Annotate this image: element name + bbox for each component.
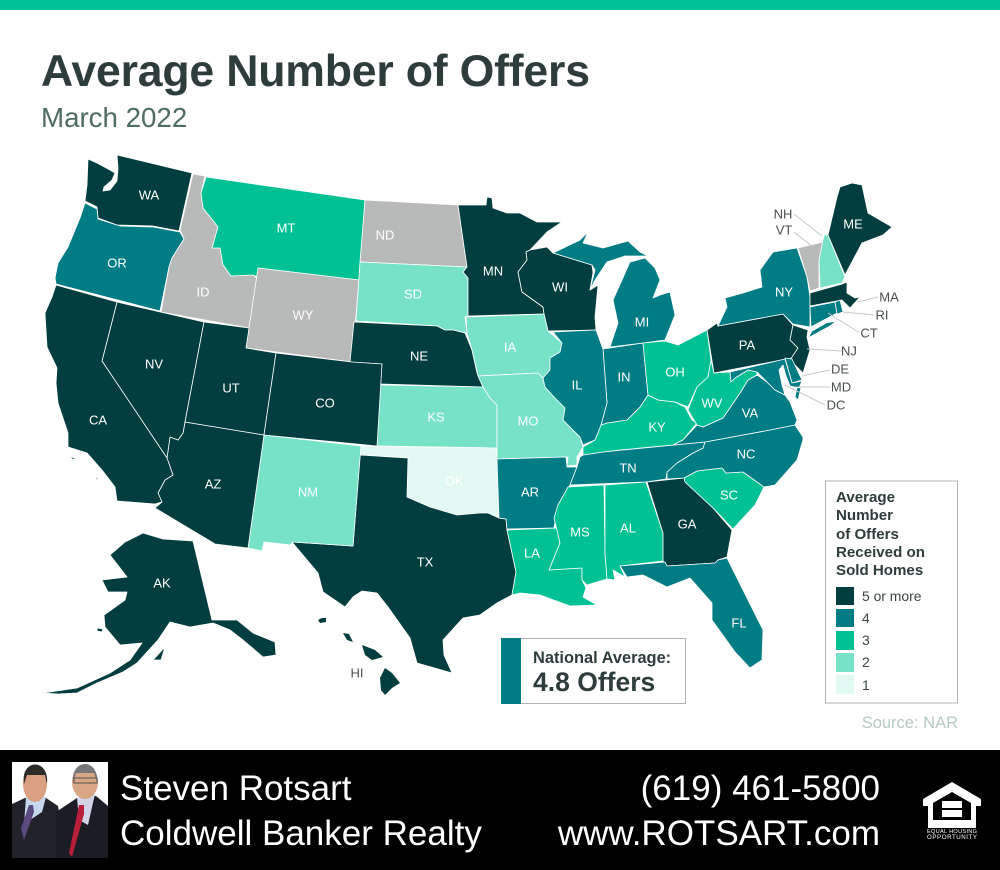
state: SC: SC xyxy=(720,488,738,502)
state: OH: OH xyxy=(665,364,685,380)
state: ND: ND xyxy=(376,228,394,242)
state: ID: ID xyxy=(196,284,210,300)
state: PA xyxy=(707,314,798,373)
label: RI xyxy=(843,308,888,322)
state: LA: LA xyxy=(524,546,540,560)
national average callout: 4.8 Offers xyxy=(533,667,655,697)
legend heading: of Offers xyxy=(836,526,899,543)
state: MD xyxy=(730,359,802,395)
state: CT xyxy=(810,302,837,327)
state: AZ xyxy=(155,422,264,548)
legend heading: Average xyxy=(836,489,895,506)
state: OR: OR xyxy=(107,256,127,270)
footer bar xyxy=(0,750,1000,870)
state: OK xyxy=(360,446,499,518)
state: SC xyxy=(684,468,764,529)
state: AK xyxy=(43,533,276,694)
state: MT: MT xyxy=(277,220,295,236)
state: KY: KY xyxy=(648,420,666,434)
label: NJ: NJ xyxy=(841,344,857,358)
state: ME: ME xyxy=(843,216,863,232)
legend labels: 4 xyxy=(862,610,870,626)
state: TX: TX xyxy=(417,554,434,570)
state: WY xyxy=(246,268,359,362)
state: NC: NC xyxy=(737,446,755,462)
state: AK: AK xyxy=(153,576,171,590)
state: WY: WY xyxy=(293,308,314,322)
legend xyxy=(826,481,958,703)
state: HI xyxy=(318,618,400,695)
legend labels: 1 xyxy=(862,677,870,693)
label: MA: MA xyxy=(879,290,899,304)
state: NE xyxy=(350,322,483,387)
state: WI: WI xyxy=(552,280,568,294)
state: AZ: AZ xyxy=(205,476,221,492)
national average callout xyxy=(501,638,686,704)
state: WA: WA xyxy=(139,188,160,202)
state: CA: CA xyxy=(89,412,107,428)
state: AL xyxy=(605,482,663,580)
state: IN xyxy=(601,343,648,425)
state: IL: IL xyxy=(572,378,582,392)
state: UT xyxy=(185,322,276,435)
state: ND xyxy=(360,200,467,267)
company name: Coldwell Banker Realty xyxy=(120,814,482,853)
state: FL: FL xyxy=(731,616,747,630)
legend heading: Number xyxy=(836,507,893,524)
state: WI xyxy=(518,247,598,331)
state: NH xyxy=(819,235,845,288)
state: ME xyxy=(828,183,892,275)
state: CO: CO xyxy=(315,396,335,410)
state: MO xyxy=(478,373,583,466)
state: TN xyxy=(570,442,705,485)
state: NV xyxy=(102,302,204,458)
state: KY xyxy=(583,395,697,455)
label: MD xyxy=(795,380,851,394)
state: GA xyxy=(647,478,732,566)
state: IL xyxy=(543,330,607,445)
label: DE: DE xyxy=(831,362,849,376)
state: OR xyxy=(55,203,184,311)
top accent bar xyxy=(0,0,1000,10)
state: SD: SD xyxy=(404,286,422,302)
state: MO: MO xyxy=(518,414,538,428)
US map xyxy=(43,155,892,695)
state: DE xyxy=(785,358,802,383)
state: PA: PA xyxy=(739,338,756,352)
icon: equal housing opportunity xyxy=(923,782,981,841)
label: DC: DC xyxy=(827,398,845,412)
agent name: Steven Rotsart xyxy=(120,769,352,808)
state: VA: VA xyxy=(742,406,759,420)
state: TN: TN xyxy=(619,460,637,476)
state: MT xyxy=(201,177,365,280)
leader labels for small northeastern states xyxy=(774,206,899,412)
state: UT: UT xyxy=(222,380,240,396)
label: NJ xyxy=(807,344,857,358)
state: CO xyxy=(264,353,382,446)
legend heading: Sold Homes xyxy=(836,562,923,579)
state: CA xyxy=(45,285,173,504)
state: NE: NE xyxy=(410,348,428,364)
phone number: (619) 461-5800 xyxy=(641,769,880,808)
state: ID xyxy=(161,174,257,328)
state: AR xyxy=(497,457,577,529)
state: NM xyxy=(248,435,361,551)
label: VT: VT xyxy=(776,222,792,238)
label: MD: MD xyxy=(831,380,851,394)
state: RI xyxy=(835,300,843,314)
state: OH xyxy=(643,330,711,407)
label: CT xyxy=(828,313,878,340)
label: CT: CT xyxy=(860,326,878,340)
state: NY xyxy=(718,248,836,338)
state: AL: AL xyxy=(620,520,636,536)
state: IN: IN xyxy=(618,370,630,384)
state: KS xyxy=(377,385,497,448)
icon: equal housing opportunity: OPPORTUNITY xyxy=(927,834,977,841)
state: LA xyxy=(507,528,597,606)
state: WV xyxy=(688,360,757,427)
state: AR: AR xyxy=(521,484,539,500)
icon: equal housing opportunity: EQUAL HOUSING xyxy=(927,829,977,835)
state: NY: NY xyxy=(775,284,793,300)
legend labels: 2 xyxy=(862,654,870,670)
legend labels: 3 xyxy=(862,632,870,648)
state: MN: MN xyxy=(483,264,503,278)
title: Average Number of Offers xyxy=(41,47,590,96)
state: IA: IA xyxy=(504,340,516,354)
state: VA xyxy=(673,375,801,445)
state: KS: KS xyxy=(427,410,445,424)
state: NM: NM xyxy=(298,484,318,500)
state: WV: WV xyxy=(702,396,723,410)
legend labels: 5 or more xyxy=(862,588,922,604)
label: DE xyxy=(802,362,849,376)
state: FL xyxy=(620,558,763,668)
label: MA xyxy=(858,290,899,304)
state: MA xyxy=(810,282,860,308)
state: NV: NV xyxy=(145,356,163,372)
subtitle: March 2022 xyxy=(41,102,187,133)
label: NH xyxy=(774,206,822,236)
label: NH: NH xyxy=(774,206,792,222)
state: MI: MI xyxy=(635,314,649,330)
state: MS xyxy=(549,485,607,585)
state: OK: OK xyxy=(445,474,464,488)
state: NC xyxy=(667,425,803,487)
legend swatches xyxy=(836,587,854,694)
state: MI xyxy=(553,232,675,347)
state: NJ xyxy=(790,325,810,373)
state: IA xyxy=(466,314,562,378)
state: VT xyxy=(798,242,823,291)
website: www.ROTSART.com xyxy=(557,814,880,853)
label: VT xyxy=(776,222,813,247)
right agent xyxy=(56,764,108,858)
legend heading: Received on xyxy=(836,544,925,561)
source note: Source: NAR xyxy=(862,714,958,732)
label: RI: RI xyxy=(876,308,888,322)
state: MS: MS xyxy=(570,524,590,540)
state: HI: HI xyxy=(350,666,364,680)
label: DC xyxy=(785,385,845,412)
state: GA: GA xyxy=(678,516,697,532)
agent photo xyxy=(12,762,108,858)
left agent xyxy=(12,764,66,858)
state: WA xyxy=(85,155,192,231)
national average callout: National Average: xyxy=(533,649,671,667)
state: MN xyxy=(458,197,562,316)
state: TX xyxy=(292,455,516,673)
state: SD xyxy=(356,262,468,333)
